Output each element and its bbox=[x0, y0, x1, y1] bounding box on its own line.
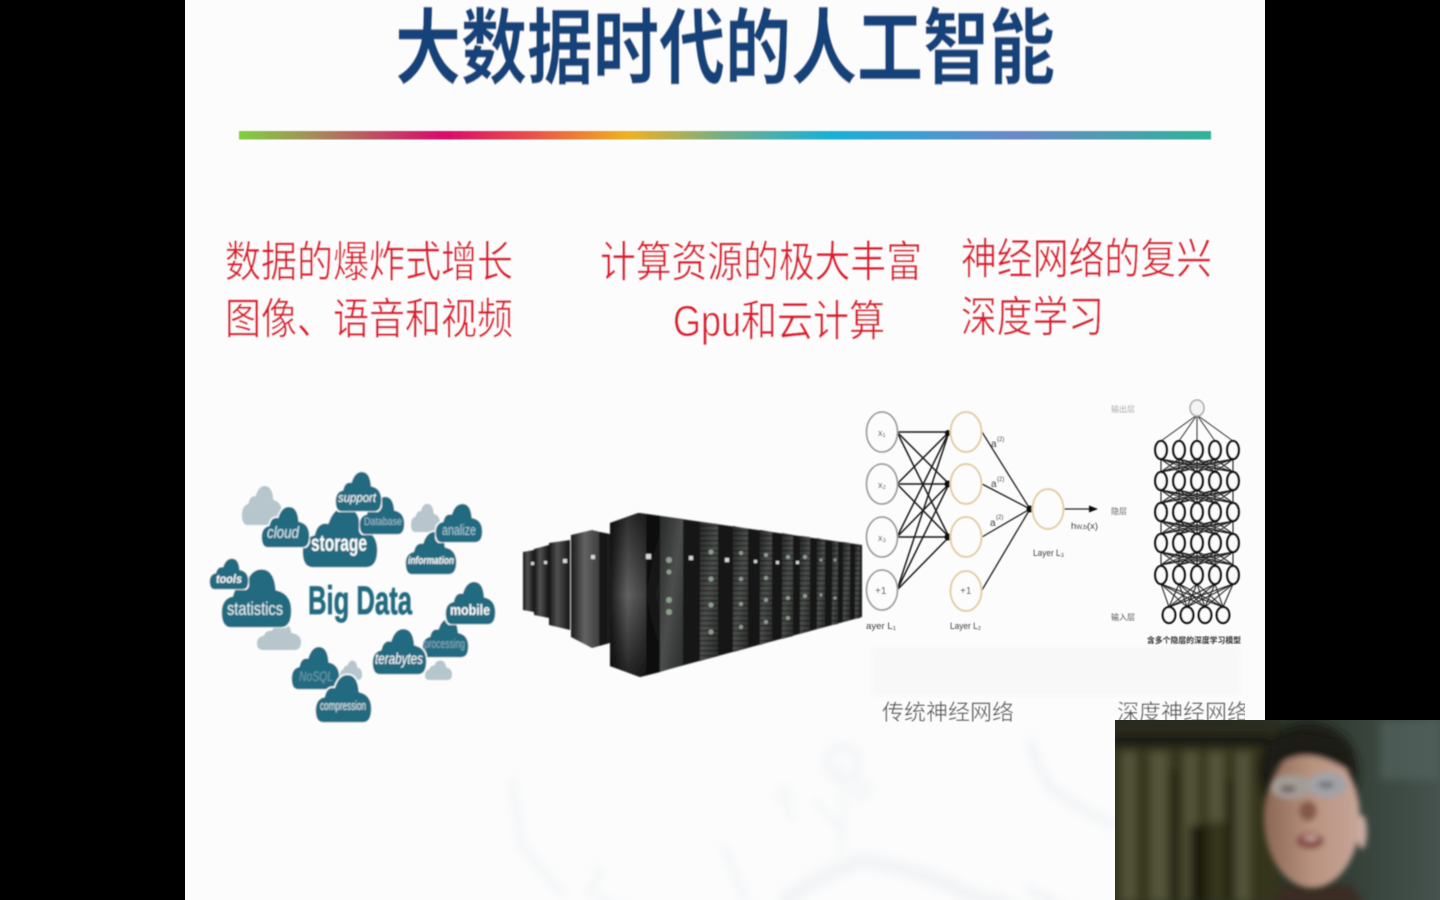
traditional neural network diagram: x₂ bbox=[878, 480, 886, 490]
traditional neural network diagram bbox=[866, 412, 1098, 631]
heading column: neural network revival: 神经网络的复兴 bbox=[961, 236, 1212, 284]
Big Data cloud illustration: Big Data bbox=[308, 577, 413, 623]
traditional neural network diagram: +1 bbox=[875, 586, 887, 597]
traditional neural network diagram: a bbox=[990, 518, 996, 529]
deep neural network diagram: 隐层 bbox=[1111, 506, 1127, 516]
heading column: neural network revival: 深度学习 bbox=[961, 294, 1104, 342]
background: ink plum branch bbox=[784, 776, 1006, 900]
traditional neural network diagram: x₁ bbox=[878, 428, 886, 438]
traditional neural network diagram: (2) bbox=[997, 477, 1004, 483]
heading column: data growth bbox=[225, 239, 513, 344]
traditional neural network diagram: +1 bbox=[960, 586, 972, 597]
traditional neural network diagram: a bbox=[991, 479, 997, 490]
heading column: data growth: 图像、语音和视频 bbox=[225, 296, 513, 344]
Big Data cloud illustration: NoSQL bbox=[299, 668, 333, 684]
traditional neural network diagram: Layer L₃ bbox=[1033, 548, 1064, 558]
Big Data cloud illustration: statistics bbox=[227, 599, 283, 619]
presenter webcam bbox=[1110, 720, 1440, 900]
Big Data cloud illustration: terabytes bbox=[375, 651, 423, 668]
supercomputer racks bbox=[523, 513, 862, 677]
traditional neural network diagram: (2) bbox=[996, 515, 1003, 521]
traditional neural network diagram: a bbox=[991, 439, 997, 450]
Big Data cloud illustration: analize bbox=[442, 522, 476, 539]
caption: deep neural network: 深度神经网络 bbox=[1117, 700, 1249, 725]
deep neural network diagram: 输出层 bbox=[1111, 404, 1135, 414]
heading column: neural network revival bbox=[961, 236, 1212, 342]
Big Data cloud illustration: storage bbox=[311, 530, 367, 556]
Big Data cloud illustration: information bbox=[408, 555, 454, 567]
traditional neural network diagram: hW,b(x) bbox=[1071, 521, 1098, 531]
Big Data cloud illustration: cloud bbox=[267, 523, 299, 542]
title: 大数据时代的人工智能 bbox=[395, 2, 1055, 95]
traditional neural network diagram: Layer L₂ bbox=[950, 621, 981, 631]
Big Data cloud illustration: compression bbox=[320, 698, 366, 713]
caption: traditional neural network: 传统神经网络 bbox=[882, 700, 1014, 725]
Big Data cloud illustration: tools bbox=[216, 572, 242, 586]
gradient divider bar bbox=[239, 131, 1211, 140]
deep neural network diagram: 含多个隐层的深度学习模型 bbox=[1147, 635, 1241, 645]
traditional neural network diagram: x₃ bbox=[878, 533, 886, 543]
Big Data cloud illustration: processing bbox=[424, 636, 465, 651]
Big Data cloud illustration: mobile bbox=[450, 602, 490, 619]
Big Data cloud illustration: support bbox=[338, 490, 377, 505]
heading column: computing resources: 计算资源的极大丰富 bbox=[600, 239, 922, 287]
Big Data cloud illustration bbox=[209, 471, 496, 723]
deep neural network diagram bbox=[1111, 400, 1241, 645]
heading column: computing resources: Gpu和云计算 bbox=[673, 298, 885, 346]
faded caption band bbox=[872, 646, 1240, 696]
slide background bbox=[185, 0, 1265, 900]
Big Data cloud illustration: Database bbox=[364, 516, 402, 528]
traditional neural network diagram: (2) bbox=[997, 437, 1004, 443]
deep neural network diagram: 输入层 bbox=[1111, 612, 1135, 622]
heading column: data growth: 数据的爆炸式增长 bbox=[225, 239, 513, 287]
heading column: computing resources bbox=[600, 239, 922, 346]
traditional neural network diagram: ayer L₁ bbox=[866, 621, 896, 631]
